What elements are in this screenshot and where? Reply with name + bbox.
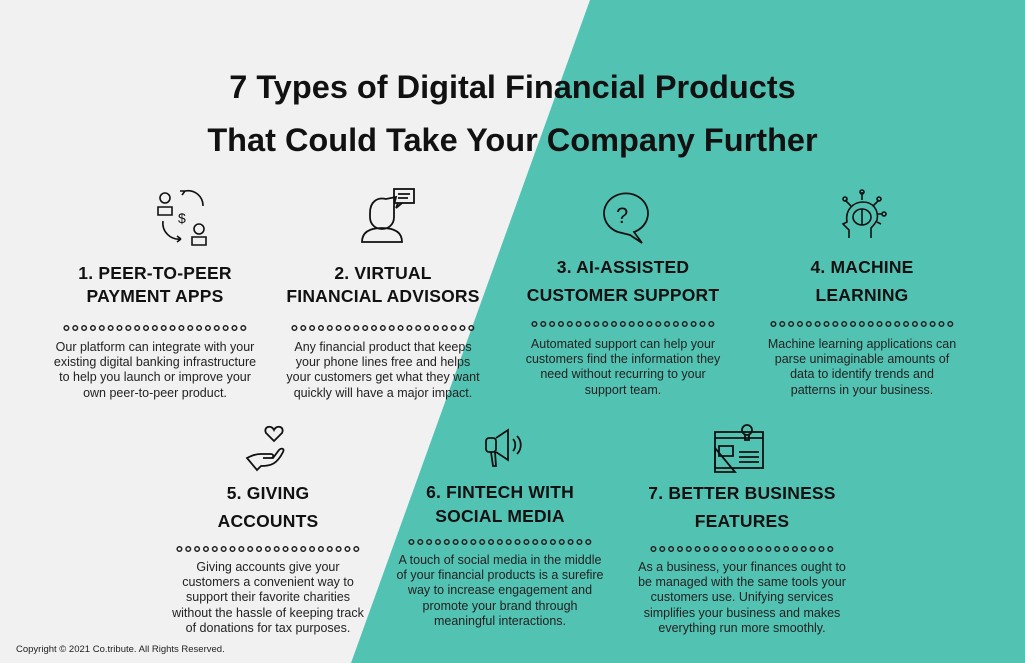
icon: megaphone	[485, 428, 522, 467]
card 4	[768, 189, 956, 397]
body: data to identify trends and	[790, 367, 934, 381]
body: Machine learning applications can	[768, 337, 956, 351]
body	[172, 560, 364, 635]
body: Our platform can integrate with your	[56, 340, 254, 354]
card 7	[638, 424, 846, 635]
title	[207, 69, 818, 158]
heading: PAYMENT APPS	[87, 286, 223, 306]
heading: FEATURES	[695, 511, 789, 531]
card 2	[286, 188, 480, 400]
body: A touch of social media in the middle	[399, 553, 601, 567]
body: without the hassle of keeping track	[172, 606, 364, 620]
heading	[218, 483, 318, 531]
body	[526, 337, 720, 397]
body: simplifies your business and makes	[644, 606, 840, 620]
icon: business tools	[714, 424, 764, 473]
card 3	[526, 192, 720, 397]
body: customers find the information they	[526, 352, 720, 366]
heading	[527, 257, 719, 305]
icon: question bubble	[603, 192, 649, 244]
heading	[286, 263, 480, 306]
heading: 1. PEER-TO-PEER	[78, 263, 232, 283]
body: customers use. Unifying services	[651, 590, 833, 604]
dots	[175, 546, 361, 552]
copyright: Copyright © 2021 Co.tribute. All Rights Reserved.	[16, 644, 225, 655]
dots	[62, 325, 248, 331]
body: support team.	[585, 383, 661, 397]
heading	[78, 263, 232, 306]
body: meaningful interactions.	[434, 614, 566, 628]
heading: CUSTOMER SUPPORT	[527, 285, 719, 305]
body: customers a convenient way to	[182, 575, 354, 589]
body: As a business, your finances ought to	[638, 560, 846, 574]
body: promote your brand through	[423, 599, 577, 613]
body: everything run more smoothly.	[658, 621, 826, 635]
icon: peer to peer: $	[178, 210, 186, 226]
heading: 3. AI-ASSISTED	[557, 257, 689, 277]
body: patterns in your business.	[791, 383, 933, 397]
dots	[290, 325, 476, 331]
body: Automated support can help your	[531, 337, 715, 351]
title: 7 Types of Digital Financial Products	[229, 69, 796, 105]
body	[638, 560, 846, 635]
heading: FINANCIAL ADVISORS	[286, 286, 480, 306]
body: your customers get what they want	[286, 370, 480, 384]
heading: 5. GIVING	[227, 483, 309, 503]
body: existing digital banking infrastructure	[54, 355, 256, 369]
body	[54, 340, 256, 400]
body: way to increase engagement and	[408, 583, 592, 597]
body: Giving accounts give your	[196, 560, 340, 574]
body	[396, 553, 604, 628]
dots	[649, 546, 835, 552]
card 1	[54, 190, 256, 400]
heading	[648, 483, 836, 531]
body: be managed with the same tools your	[638, 575, 846, 589]
body: support their favorite charities	[186, 590, 350, 604]
card 5	[172, 426, 364, 635]
heading: LEARNING	[816, 285, 908, 305]
body: of donations for tax purposes.	[186, 621, 350, 635]
heading	[426, 482, 574, 526]
heading: 7. BETTER BUSINESS	[648, 483, 836, 503]
icon: question bubble: ?	[616, 203, 628, 228]
heading: 2. VIRTUAL	[334, 263, 432, 283]
heading: 6. FINTECH WITH	[426, 482, 574, 502]
body: your phone lines free and helps	[296, 355, 470, 369]
body	[286, 340, 480, 400]
body: quickly will have a major impact.	[294, 386, 472, 400]
body: to help you launch or improve your	[59, 370, 251, 384]
dots	[407, 539, 593, 545]
icon: peer to peer	[157, 190, 207, 246]
heading: 4. MACHINE	[810, 257, 914, 277]
dots	[530, 321, 716, 327]
body	[768, 337, 956, 397]
heading: ACCOUNTS	[218, 511, 318, 531]
icon: advisor	[361, 188, 415, 243]
icon: hand heart	[246, 426, 284, 472]
body: need without recurring to your	[540, 367, 706, 381]
body: parse unimaginable amounts of	[775, 352, 949, 366]
card 6	[396, 428, 604, 628]
body: Any financial product that keeps	[294, 340, 472, 354]
heading	[810, 257, 914, 305]
body: of your financial products is a surefire	[396, 568, 604, 582]
icon: brain head	[842, 189, 887, 238]
title: That Could Take Your Company Further	[207, 122, 818, 158]
body: own peer-to-peer product.	[83, 386, 227, 400]
heading: SOCIAL MEDIA	[435, 506, 565, 526]
dots	[769, 321, 955, 327]
